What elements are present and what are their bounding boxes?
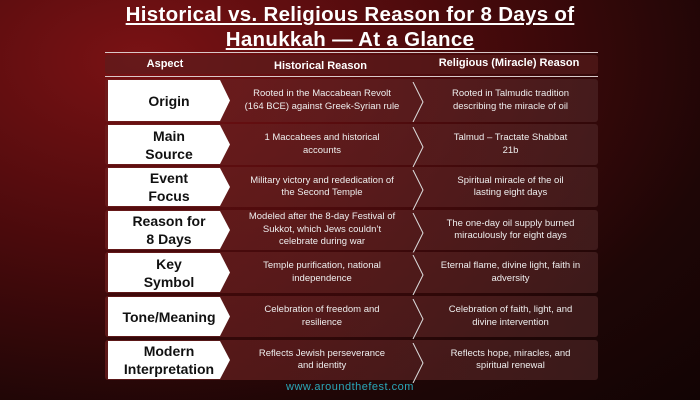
row: reason for 8 days [105,210,598,250]
row: origin: Origin [148,92,190,108]
row: event focus: Event [150,170,188,186]
row: reason for 8 days: The one-day oil supply burned miraculously for eight days [447,218,574,241]
header row: Historical Reason [274,60,367,72]
header row: Aspect [147,58,183,70]
row: modern: Reflects Jewish perseverance [259,348,385,358]
row: origin: Rooted in Talmudic tradition describing the miracle of oil [452,88,569,112]
row: key symbol: Temple purification, national independence [263,260,381,284]
row: modern: and identity [298,360,346,371]
row: reason for 8 days: Modeled after the 8-day Festival of Sukkot, which Jews couldn’t celebrate during war [249,211,395,247]
row: main source: 1 Maccabees and historical [264,132,380,143]
row: tone: divine intervention [472,316,549,328]
row: modern: Reflects hope, miracles, and [451,348,570,358]
row: key symbol: Eternal flame, divine light, faith in adversity [441,260,580,284]
row: event focus: Spiritual miracle of the oil [457,174,564,186]
title: Historical vs. Religious Reason for 8 Days of [126,3,574,26]
row: modern: spiritual renewal [476,360,545,371]
row: main source [105,124,598,165]
row: reason for 8 days: Reason for [132,213,206,229]
row: tone: Tone/Meaning [122,308,216,324]
row: modern: Modern [144,343,194,359]
row: tone: Celebration of freedom and [264,304,380,315]
row: tone: Celebration of faith, light, and [449,304,572,315]
title [126,3,574,51]
row: main source: Talmud – Tractate Shabbat [454,132,567,143]
row: event focus: Military victory and rededication of the Second Temple [250,174,394,198]
header row [105,55,598,74]
row: main source: accounts [303,144,341,156]
row: reason for 8 days: 8 Days [146,231,192,247]
row: modern [105,340,598,380]
title: Hanukkah — At a Glance [226,28,474,51]
row: tone: resilience [302,316,342,328]
row: event focus [105,167,598,207]
row: origin: Rooted in the Maccabean Revolt (164 BCE) against Greek-Syrian rule [245,88,399,112]
row: key symbol: Key [156,256,182,272]
row: main source: Source [145,146,193,162]
row: event focus: lasting eight days [474,187,547,198]
row: modern: Interpretation [124,361,214,377]
row: key symbol: Symbol [144,274,194,290]
row: main source: 21b [503,144,518,156]
header row: Religious (Miracle) Reason [439,57,579,69]
url footer: www.aroundthefest.com [286,381,414,393]
row: main source: Main [153,128,185,144]
row: tone [105,296,598,337]
row: key symbol [105,252,598,293]
row: event focus: Focus [148,188,190,204]
row: origin [105,79,598,122]
